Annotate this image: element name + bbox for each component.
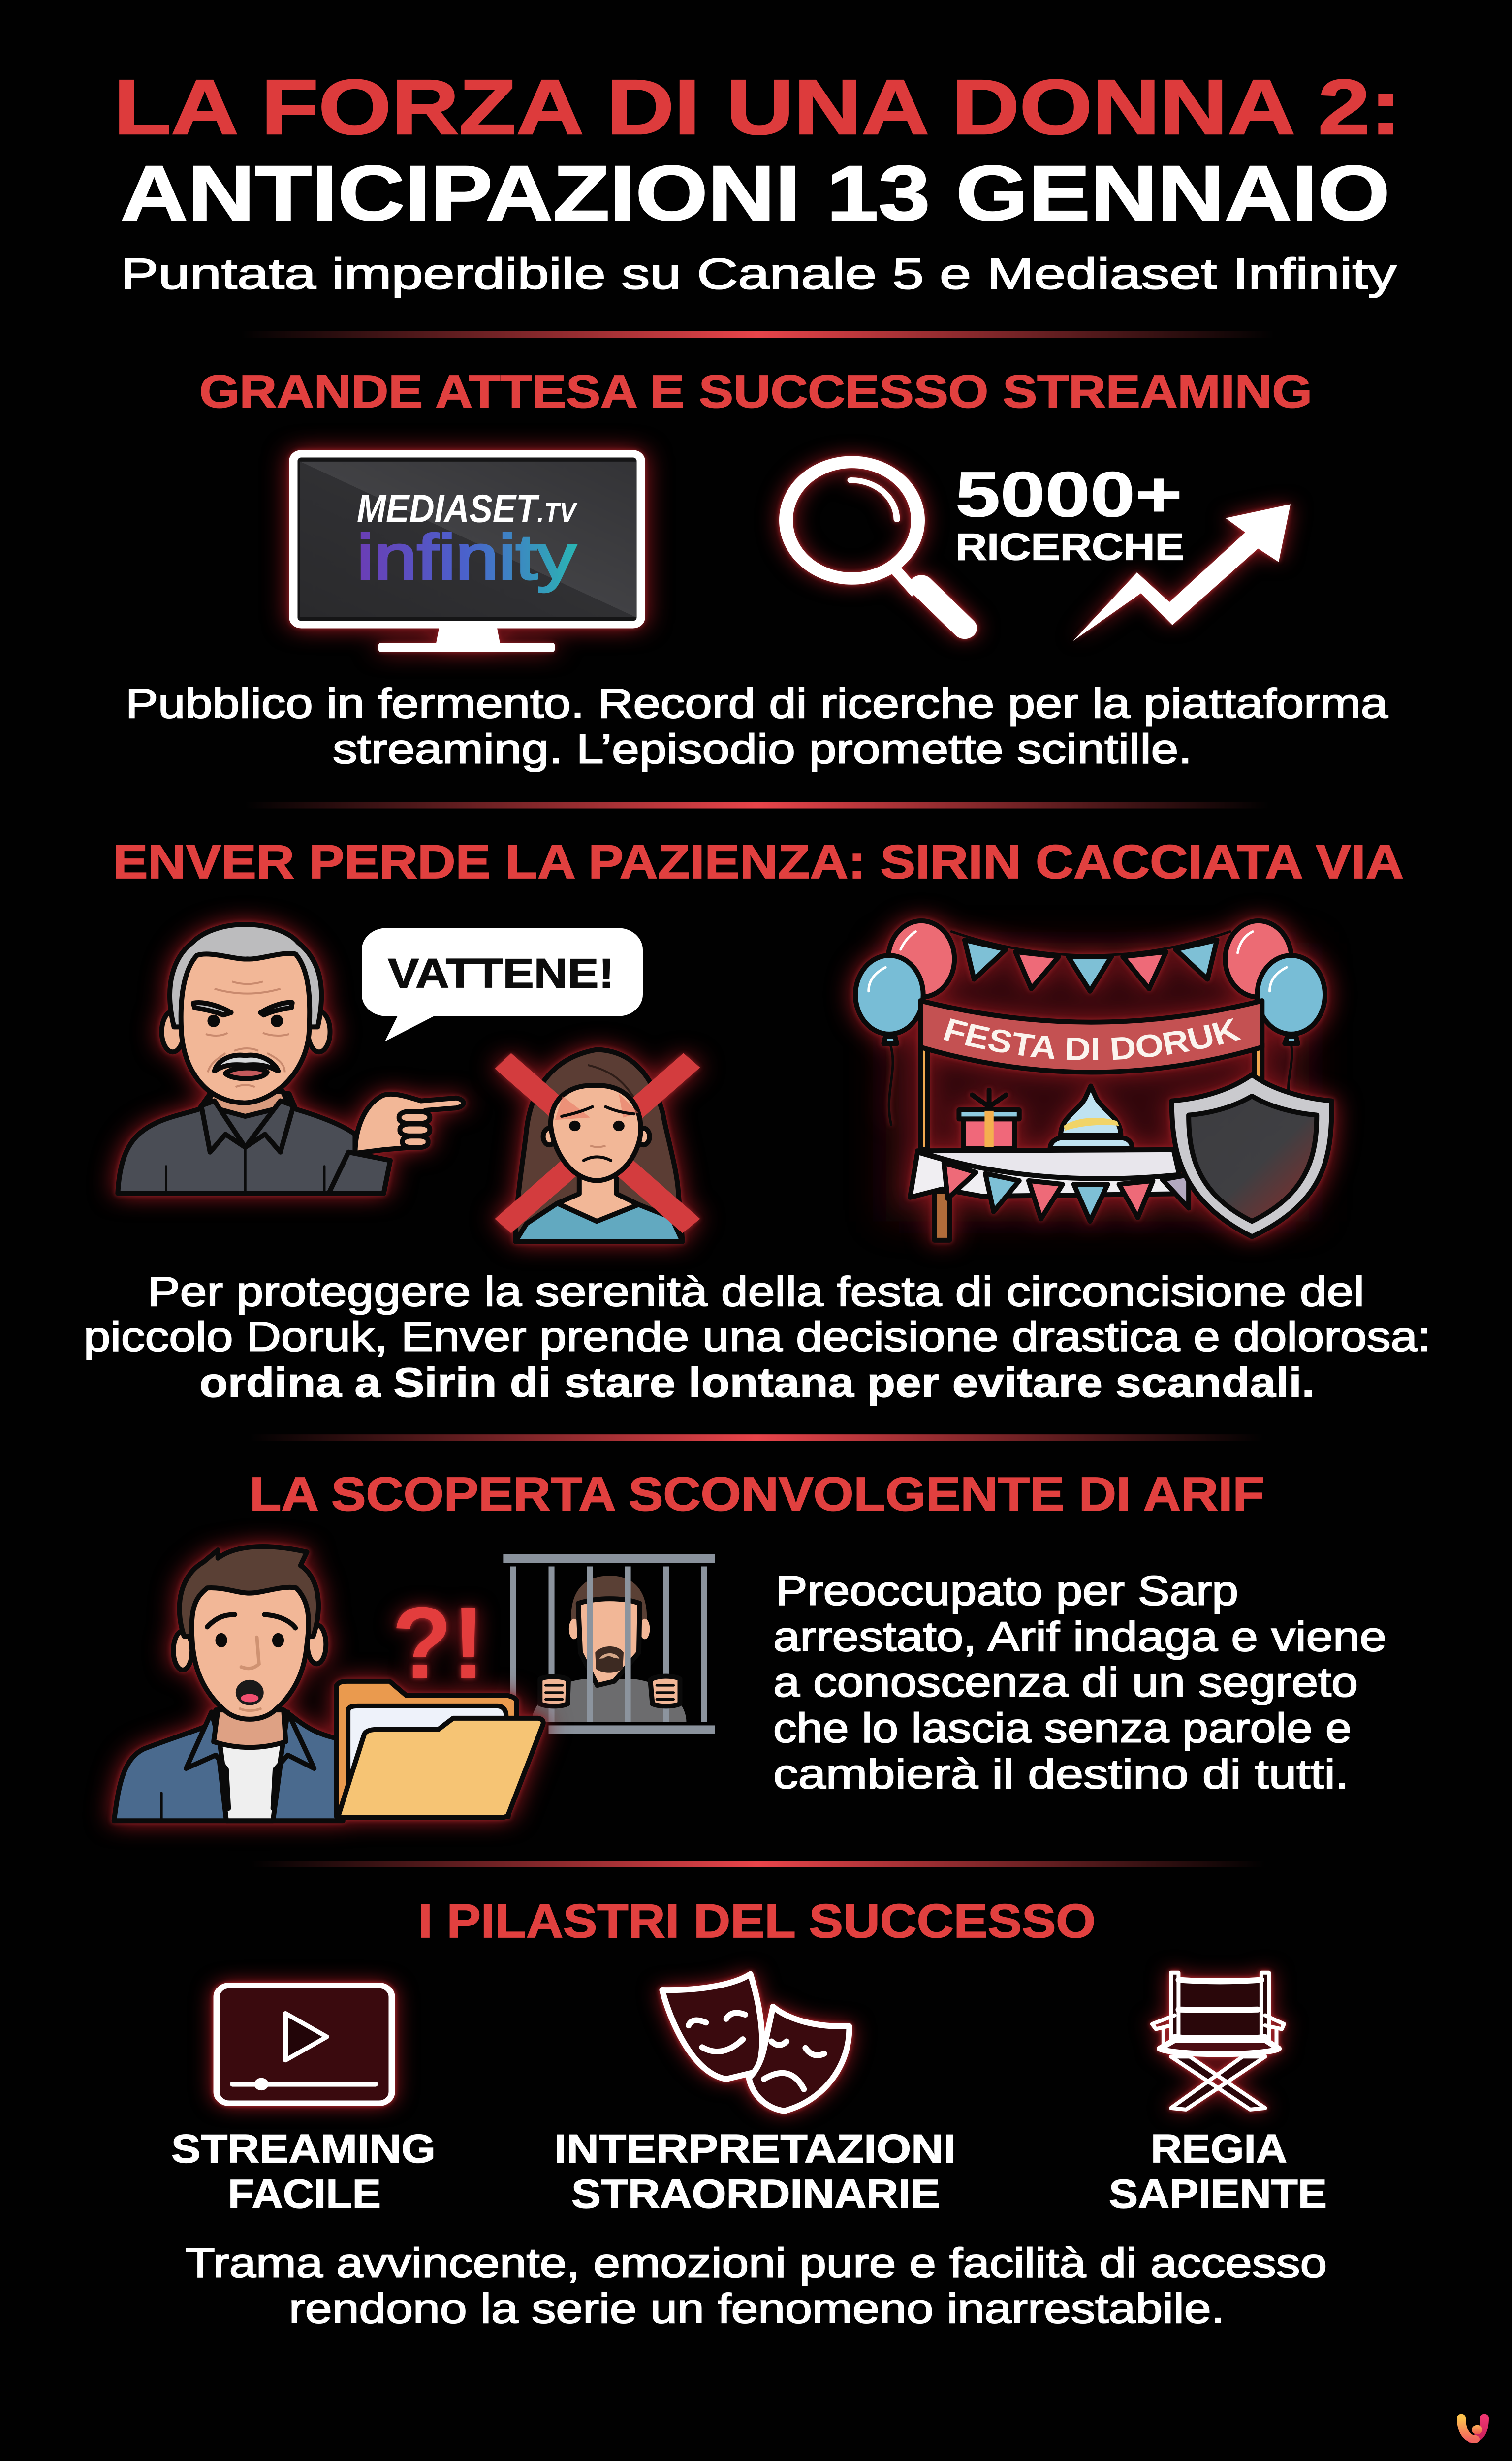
prisoner hands (540, 1676, 568, 1706)
prisoner hair (571, 1576, 647, 1628)
chair seat (1160, 2040, 1279, 2054)
face (192, 1587, 309, 1719)
eyebrows (207, 1614, 295, 1628)
closing text (186, 2240, 1327, 2332)
section heading: pillars: I PILASTRI DEL SUCCESSO (418, 1894, 1096, 1947)
tv body (293, 454, 641, 652)
shirt (515, 1203, 683, 1241)
speech bubble (362, 928, 643, 1041)
section heading: enver: ENVER PERDE LA PAZIENZA: SIRIN CACCIATA VIA (113, 835, 1404, 888)
illustration: Enver pointing (118, 924, 464, 1193)
bars (510, 1566, 707, 1722)
collar (186, 1712, 228, 1808)
chair legs (1171, 2056, 1265, 2110)
pillar labels: REGIA (1151, 2126, 1287, 2171)
lower drape (910, 1152, 1173, 1198)
pillar labels: INTERPRETAZIONI (554, 2126, 956, 2171)
illustration: Sirin crossed out (495, 1049, 700, 1241)
mouth (236, 1680, 264, 1705)
hair (180, 1546, 318, 1636)
prisoner beard (595, 1646, 624, 1673)
body text: enver: Per proteggere la serenità della festa di circoncisione del (148, 1268, 1364, 1315)
eyebrows (193, 1003, 231, 1015)
icon: tv with Mediaset Infinity logo (293, 454, 641, 652)
body text: enver: piccolo Doruk, Enver prende una decisione drastica e dolorosa: (84, 1314, 1431, 1360)
wrinkles (206, 981, 289, 1072)
body text: arif: Preoccupato per Sarp (776, 1568, 1238, 1614)
lower bunting flags (944, 1163, 976, 1199)
body text: arif: cambierà il destino di tutti. (773, 1751, 1349, 1798)
bunting string (951, 932, 1230, 955)
paper (348, 1706, 506, 1788)
upper bunting flags (965, 940, 1006, 979)
sad mask (749, 2007, 849, 2111)
neck (557, 1170, 638, 1221)
illustration: Arif shocked (114, 1546, 543, 1821)
logo: mediaset.tv: MEDIASET.TV (357, 486, 578, 530)
pointing hand (355, 1094, 464, 1153)
balloon strings (889, 1043, 1292, 1125)
poles (920, 1043, 927, 1150)
subtitle: Puntata imperdibile su Canale 5 e Mediaset Infinity (121, 250, 1396, 298)
stat label: ricerche: RICERCHE (955, 526, 1184, 568)
body text: arif (773, 1568, 1386, 1798)
chair back and arms (1171, 1973, 1269, 2040)
closing text: Trama avvincente, emozioni pure e facilità di accesso (186, 2240, 1327, 2286)
pink balloons (888, 921, 954, 997)
table top (917, 1150, 1179, 1179)
section heading: streaming: GRANDE ATTESA E SUCCESSO STREAMING (199, 366, 1312, 417)
logo: infinity: infinity (357, 522, 576, 593)
body text: arif: arrestato, Arif indaga e viene (773, 1613, 1386, 1660)
icon: video player (217, 1986, 392, 2103)
neck (206, 1091, 289, 1116)
icon: magnifying glass (786, 462, 965, 628)
cake (1061, 1086, 1121, 1136)
ears (173, 1631, 192, 1670)
closing text: rendono la serie un fenomeno inarrestabile. (289, 2285, 1225, 2332)
body text: arif: che lo lascia senza parole e (773, 1705, 1352, 1751)
body text: streaming: Pubblico in fermento. Record di ricerche per la piattaforma (126, 680, 1388, 727)
watermark logo (1461, 2418, 1484, 2439)
mouth (225, 1068, 267, 1078)
t-shirt (217, 1741, 284, 1821)
pillar labels: STREAMING (171, 2126, 436, 2171)
speech bubble: VATTENE! (388, 950, 614, 997)
icon: theatre masks (662, 1974, 849, 2111)
banner (920, 1001, 1262, 1072)
neck (214, 1710, 286, 1747)
body text: arif: a conoscenza di un segreto (773, 1659, 1358, 1705)
icon: rising arrow (1073, 504, 1291, 641)
happy mask (662, 1974, 762, 2079)
section heading: arif: LA SCOPERTA SCONVOLGENTE DI ARIF (250, 1468, 1264, 1520)
features (569, 1121, 581, 1131)
eyes (207, 1015, 220, 1027)
title line 2: ANTICIPAZIONI 13 GENNAIO (121, 150, 1390, 237)
gift (972, 1090, 1006, 1107)
eyes (216, 1633, 227, 1647)
folder back (337, 1681, 517, 1817)
icon: director chair (1152, 1973, 1284, 2110)
prisoner face (569, 1619, 579, 1639)
hair (515, 1049, 683, 1241)
ears (162, 1011, 184, 1052)
hair (170, 924, 321, 1027)
pillar labels: FACILE (228, 2172, 381, 2216)
illustration: prisoner behind bars (503, 1554, 715, 1734)
folder front (338, 1718, 543, 1818)
body text: enver: ordina a Sirin di stare lontana per evitare scandali. (199, 1359, 1315, 1406)
nose (241, 1637, 259, 1669)
title line 1: LA FORZA DI UNA DONNA 2: (114, 63, 1401, 151)
stat: 5000+: 5000+ (955, 459, 1182, 530)
red X (495, 1053, 700, 1233)
face (181, 953, 310, 1103)
prisoner body (532, 1679, 686, 1722)
pillar labels: SAPIENTE (1109, 2172, 1327, 2216)
ears (543, 1128, 556, 1145)
banner text: FESTA DI DORUK (943, 1018, 1241, 1060)
pillar labels: STRAORDINARIE (571, 2172, 940, 2216)
body text: streaming: streaming. L’episodio promette scintille. (333, 726, 1192, 772)
face (551, 1085, 641, 1181)
jacket (118, 1094, 390, 1193)
body text: streaming (126, 680, 1388, 772)
moustache (215, 1055, 278, 1071)
pillar labels (171, 2126, 1327, 2216)
icon: question and exclamation marks: ?! (392, 1585, 485, 1700)
blue balloons (855, 955, 923, 1034)
jacket (114, 1710, 343, 1821)
body text: enver (84, 1268, 1431, 1406)
tv screen (300, 462, 636, 617)
illustration: Doruk party table (855, 921, 1332, 1240)
shield (1172, 1074, 1332, 1237)
sleeve (329, 1152, 390, 1193)
collar (201, 1101, 245, 1152)
